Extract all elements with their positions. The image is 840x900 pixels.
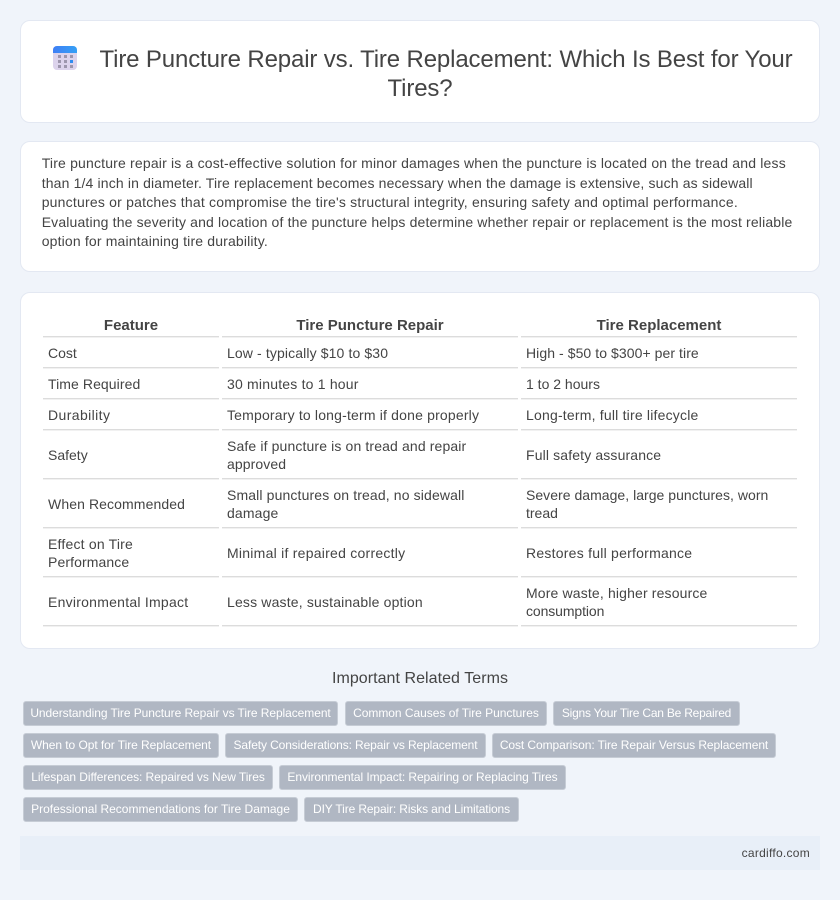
row: environmental impact: Environmental Impact [48,594,188,610]
related term tags: Understanding Tire Puncture Repair vs Tire Replacement [30,706,331,720]
table header [104,317,722,334]
summary text: option for maintaining tire durability. [42,233,268,249]
row: effect on tire performance: Restores full performance [526,545,692,561]
row: effect on tire performance: Performance [48,554,129,570]
row: when recommended: tread [526,505,558,521]
related term tags [23,701,776,822]
row: time required [48,376,600,392]
row: durability [48,407,699,423]
row: when recommended: Small punctures on tread, no sidewall [227,487,464,503]
related term tags: Cost Comparison: Tire Repair Versus Replacement [500,738,768,752]
row: safety: Safety [48,447,88,463]
row: effect on tire performance: Minimal if repaired correctly [227,545,405,561]
panel: comparison table [20,292,820,649]
related term tags: Lifespan Differences: Repaired vs New Tires [31,770,265,784]
row: cost: Cost [48,345,77,361]
footer brand: cardiffo.com [742,846,810,860]
row: time required: 1 to 2 hours [526,376,600,392]
table header: Tire Replacement [597,317,721,334]
row: safety: Safe if puncture is on tread and repair [227,438,466,454]
heading: related terms: Important Related Terms [332,670,508,687]
row: durability: Temporary to long-term if done properly [227,407,479,423]
related term tags: Professional Recommendations for Tire Damage [31,802,290,816]
panel: title card [20,20,820,123]
row: environmental impact: More waste, higher resource [526,585,707,601]
row: cost [48,345,699,361]
row: safety: approved [227,456,286,472]
related term tags: Environmental Impact: Repairing or Replacing Tires [287,770,558,784]
summary text: Tire puncture repair is a cost-effective solution for minor damages when the puncture is located on the tread and less [42,155,786,171]
footer [20,836,820,870]
row: time required: 30 minutes to 1 hour [227,376,359,392]
row: durability: Long-term, full tire lifecycle [526,407,699,423]
title [100,46,792,102]
row: environmental impact: Less waste, sustainable option [227,594,423,610]
row: when recommended: When Recommended [48,496,185,512]
row: time required: Time Required [48,376,140,392]
row: cost: Low - typically $10 to $30 [227,345,388,361]
row: when recommended [48,487,768,521]
row: cost: High - $50 to $300+ per tire [526,345,699,361]
row: safety: Full safety assurance [526,447,661,463]
related term tags: DIY Tire Repair: Risks and Limitations [313,802,510,816]
icon: calendar [53,46,77,70]
table header: Feature [104,317,158,334]
table header: Tire Puncture Repair [296,317,444,334]
row: environmental impact: consumption [526,603,604,619]
summary text: than 1/4 inch in diameter. Tire replacement becomes necessary when the damage is extensive, such as sidewall [42,174,753,190]
row: effect on tire performance: Effect on Tire [48,536,133,552]
row: when recommended: Severe damage, large punctures, worn [526,487,768,503]
row: durability: Durability [48,407,110,423]
title: Tire Puncture Repair vs. Tire Replacement: Which Is Best for Your [100,46,792,73]
related term tags: Signs Your Tire Can Be Repaired [562,706,731,720]
summary text [42,155,792,249]
related term tags: When to Opt for Tire Replacement [31,738,211,752]
row: when recommended: damage [227,505,278,521]
row: effect on tire performance [48,536,692,570]
related term tags: Safety Considerations: Repair vs Replacement [234,738,477,752]
panel: summary [20,141,820,272]
row: safety [48,438,661,472]
title: Tires? [388,75,452,102]
summary text: punctures or patches that compromise the tire's structural integrity, ensuring safety and optimal performance. [42,194,738,210]
summary text: Evaluating the severity and location of the puncture helps determine whether repair or replacement is the most reliable [42,214,792,230]
related term tags: Common Causes of Tire Punctures [353,706,539,720]
row: environmental impact [48,585,707,619]
